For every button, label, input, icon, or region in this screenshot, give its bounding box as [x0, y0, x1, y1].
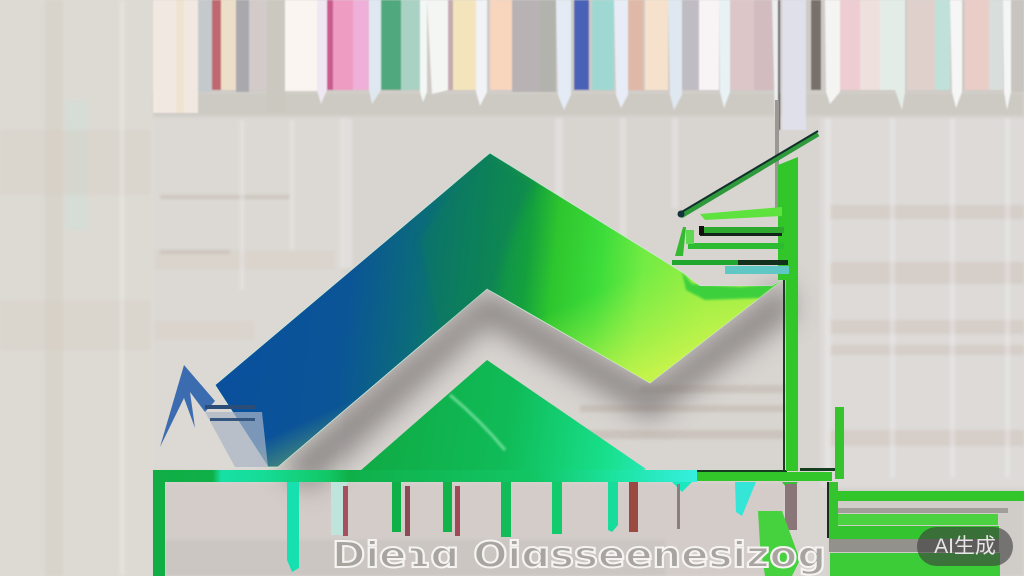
thin vertical pole — [775, 100, 779, 210]
chevron shadow — [278, 280, 795, 490]
small blue mountain icon — [160, 365, 268, 467]
top colour stripe band — [153, 0, 1024, 130]
badge: AI generated: AI生成 — [934, 535, 996, 558]
stacked green lines icon — [672, 131, 818, 274]
lower green triangle — [360, 360, 646, 471]
green base frame — [153, 468, 835, 576]
right lower green bracket — [827, 407, 1024, 576]
garbled caption text: Dieɿɑ Oiɑsseenesizog — [332, 535, 826, 576]
chevron inner band — [682, 272, 785, 300]
right vertical green post — [778, 157, 798, 471]
small green cylinder — [758, 511, 800, 576]
chevron dark wedge — [420, 150, 535, 330]
badge: AI generated — [917, 527, 1013, 566]
chevron lime tip — [264, 266, 782, 467]
main rising chevron arrow — [215, 150, 785, 467]
triangle light streak — [450, 395, 505, 450]
